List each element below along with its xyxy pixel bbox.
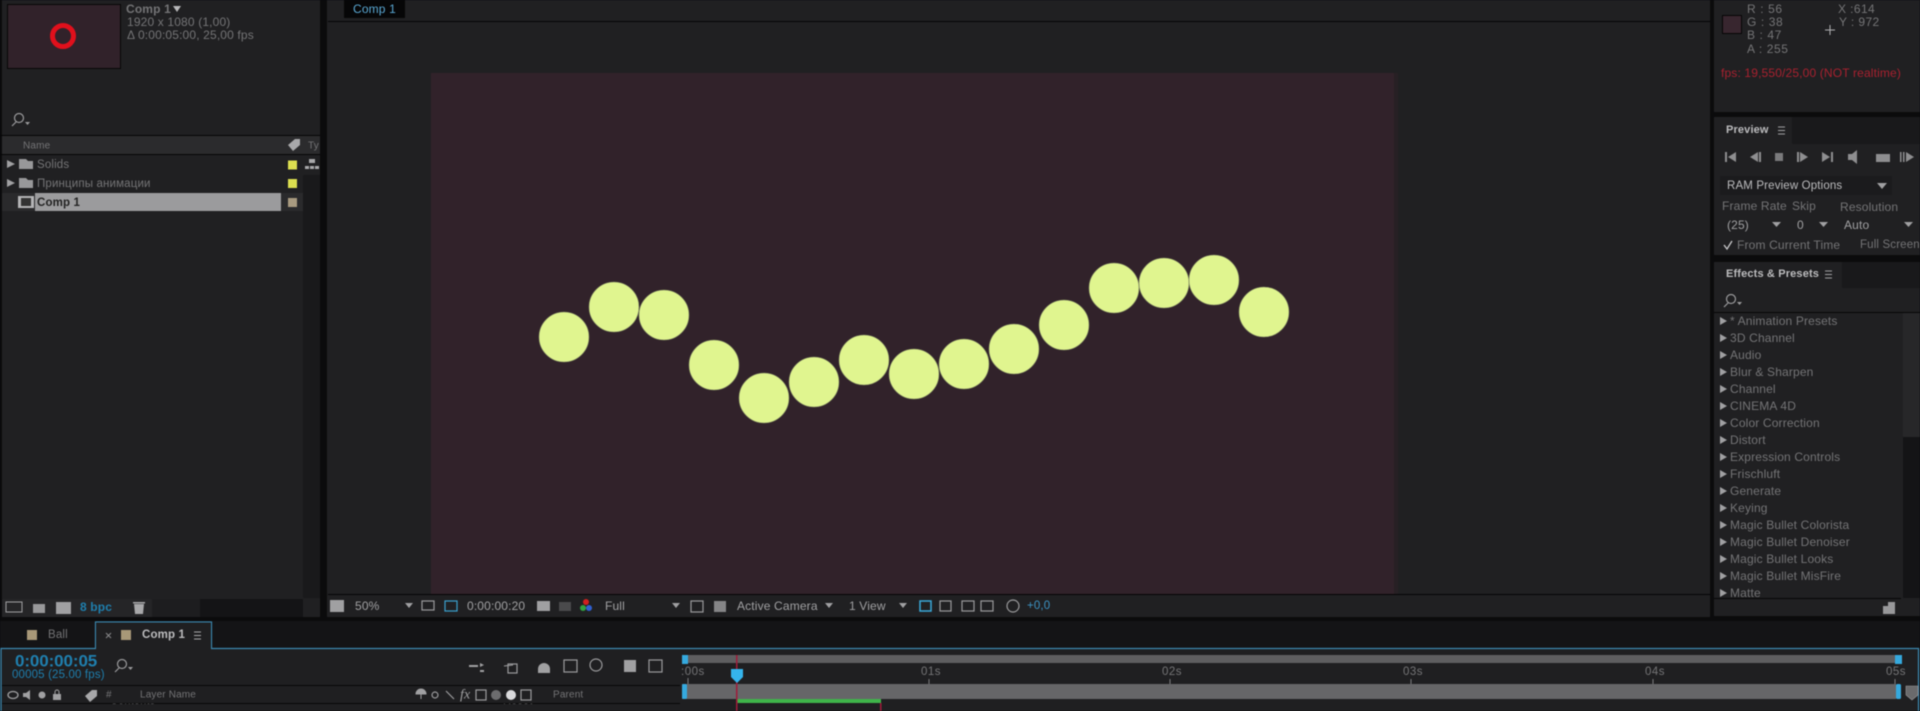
effects list: Magic Bullet Denoiser <box>1730 535 1850 549</box>
preview settings: Full Screen <box>1860 239 1920 251</box>
effects list <box>1720 314 1850 600</box>
effects list: Magic Bullet Looks <box>1730 552 1833 566</box>
panel: timeline <box>0 622 1920 711</box>
partial layer row: Contents <box>110 695 156 707</box>
preview tab: Preview <box>1726 124 1769 136</box>
time ruler: 02s <box>1162 666 1182 678</box>
column header row <box>2 685 680 704</box>
playback controls <box>1725 150 1914 164</box>
work area bar <box>682 684 1901 699</box>
effects list: Magic Bullet MisFire <box>1730 569 1841 583</box>
preview settings: Frame Rate <box>1722 199 1787 213</box>
viewer toolbar: Active Camera <box>737 599 818 613</box>
preview settings: Skip <box>1792 199 1816 213</box>
RGBA values: G : 38 <box>1747 15 1783 29</box>
XY coordinates <box>1825 2 1880 35</box>
scrollbar <box>1903 313 1920 598</box>
time ruler: :00s <box>681 666 705 678</box>
time ruler: 01s <box>921 666 941 678</box>
panel: info <box>1714 0 1920 112</box>
preview settings: (25) <box>1727 218 1749 232</box>
panel: project <box>0 0 320 617</box>
timeline toolbar icons <box>469 659 662 673</box>
type column <box>303 175 320 598</box>
preview settings <box>1722 199 1920 252</box>
comp info text <box>126 2 254 42</box>
effects list: Distort <box>1730 433 1766 447</box>
effects list: CINEMA 4D <box>1730 399 1796 413</box>
RAM preview options <box>1720 176 1892 195</box>
partial layer row: Reset <box>503 695 532 707</box>
viewer toolbar: 50% <box>355 599 380 613</box>
timeline active border <box>1 622 1918 711</box>
preview settings: 0 <box>1797 218 1804 232</box>
column header row: Parent <box>553 690 583 700</box>
viewer tab <box>344 0 405 18</box>
icon: timeline search <box>115 660 133 672</box>
viewer toolbar: 1 View <box>849 599 886 613</box>
preview settings: From Current Time <box>1737 238 1840 252</box>
time ruler <box>681 666 1906 684</box>
comp info text: Δ 0:00:05:00, 25,00 fps <box>127 28 254 42</box>
column header row: Layer Name <box>140 690 196 700</box>
tab: Ball: Ball <box>48 629 68 641</box>
effects list: Magic Bullet Colorista <box>1730 518 1850 532</box>
RGBA values <box>1747 2 1789 56</box>
column header row: # <box>106 690 112 700</box>
column header row: fx <box>460 688 471 702</box>
effects list: Keying <box>1730 501 1768 515</box>
effects list: Audio <box>1730 348 1762 362</box>
panel: preview <box>1714 117 1920 255</box>
comp info text: 1920 x 1080 (1,00) <box>127 15 230 29</box>
row: Solids: Solids <box>37 159 69 171</box>
thumbnail: composition preview <box>8 4 120 68</box>
effects tab: Effects & Presets <box>1726 268 1819 280</box>
row: Comp 1 selected: Comp 1 <box>37 197 81 209</box>
effects list: Generate <box>1730 484 1781 498</box>
column header row: Ty <box>308 140 319 152</box>
effects list: 3D Channel <box>1730 331 1795 345</box>
effects list: Matte <box>1730 586 1761 600</box>
project footer toolbar: 8 bpc <box>80 600 112 614</box>
playhead <box>731 655 743 711</box>
time ruler: 03s <box>1403 666 1423 678</box>
current time: 0:00:00:05 <box>15 652 97 670</box>
column header row: Name <box>23 140 51 152</box>
viewer tab: Comp 1 <box>353 2 396 16</box>
column header row <box>0 135 320 155</box>
effects list: Frischluft <box>1730 467 1781 481</box>
row: Solids <box>7 159 319 171</box>
RGBA values: A : 255 <box>1747 42 1789 56</box>
comp info text: Comp 1 <box>126 2 171 16</box>
tab: Comp 1 <box>96 622 211 649</box>
panel: viewer <box>327 0 1710 617</box>
viewer toolbar: +0,0 <box>1027 600 1050 612</box>
RGBA values: B : 47 <box>1747 28 1782 42</box>
animated balls <box>539 255 1289 423</box>
tab: Comp 1: Comp 1 <box>142 629 186 641</box>
fps warning: fps: 19,550/25,00 (NOT realtime) <box>1721 66 1901 80</box>
effects list: Expression Controls <box>1730 450 1840 464</box>
time ruler: 04s <box>1645 666 1665 678</box>
XY coordinates: X :614 <box>1838 2 1875 16</box>
panel: effects and presets <box>1714 262 1920 616</box>
effects list: Channel <box>1730 382 1776 396</box>
row: Принципы анимации: Принципы анимации <box>37 178 151 190</box>
colour swatch <box>1722 16 1742 34</box>
effects footer <box>1714 598 1920 616</box>
project footer toolbar <box>2 599 303 617</box>
RGBA values: R : 56 <box>1747 2 1783 16</box>
time ruler: 05s <box>1886 666 1906 678</box>
current time: 00005 (25.00 fps) <box>12 669 105 681</box>
zoom slider handle <box>1906 686 1918 700</box>
preview settings: Auto <box>1844 218 1869 232</box>
RAM preview options: RAM Preview Options <box>1727 180 1842 192</box>
effects list: * Animation Presets <box>1730 314 1838 328</box>
layer track marker <box>880 703 882 711</box>
composition canvas <box>431 73 1398 594</box>
row: Принципы анимации <box>7 178 297 190</box>
partial layer row <box>112 702 532 704</box>
icon: effects search <box>1724 294 1742 307</box>
effects list: Color Correction <box>1730 416 1820 430</box>
viewer toolbar: 0:00:00:20 <box>467 599 525 613</box>
cached frames bar <box>736 699 881 703</box>
viewer toolbar: Full <box>605 599 625 613</box>
current time <box>12 652 105 681</box>
row: Comp 1 selected <box>2 193 303 211</box>
timeline navigator bar <box>682 655 1902 664</box>
icon: project search <box>12 114 30 126</box>
preview settings: Resolution <box>1840 200 1898 214</box>
tab: Ball <box>27 629 68 641</box>
XY coordinates: Y : 972 <box>1839 15 1880 29</box>
viewer toolbar <box>328 594 1710 613</box>
effects list: Blur & Sharpen <box>1730 365 1813 379</box>
